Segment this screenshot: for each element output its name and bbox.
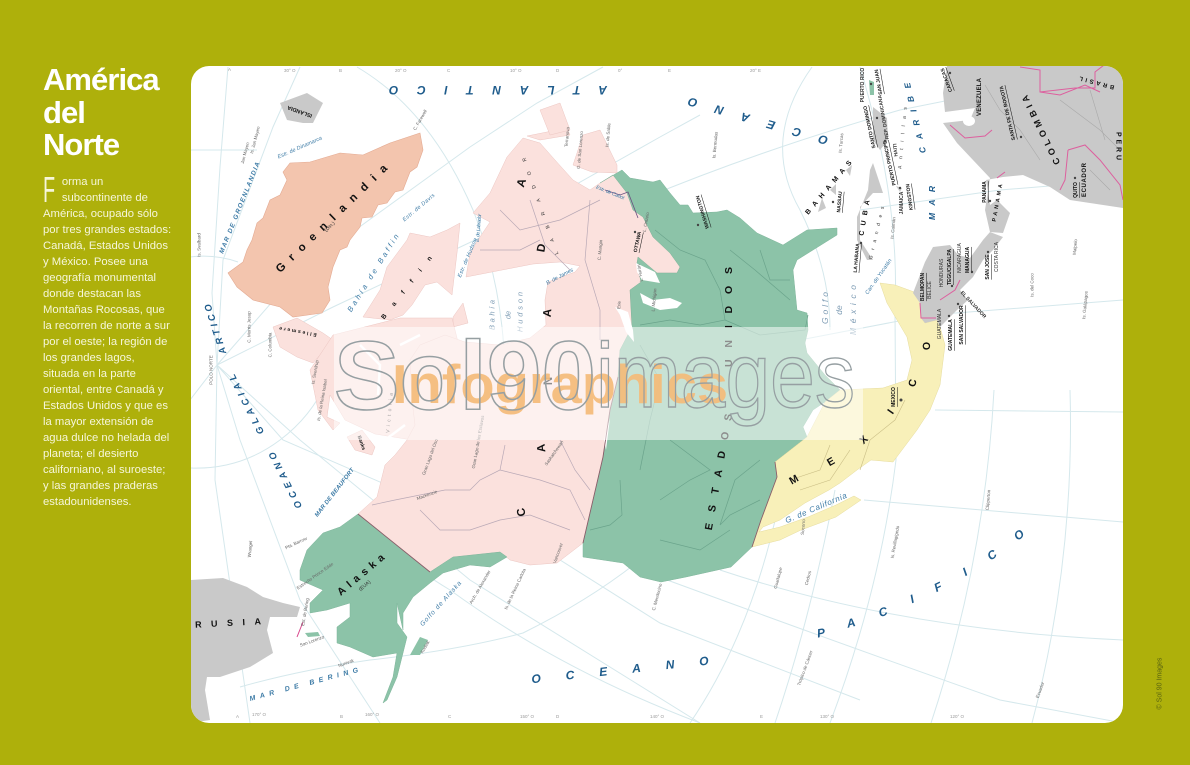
Canada-Alaska border	[358, 514, 430, 572]
minor labels: Is. Galápagos	[1081, 290, 1089, 319]
minor labels: L. Hurón	[636, 264, 644, 282]
graticule tick labels: B	[339, 68, 342, 73]
capital labels: NICARAGUA	[957, 242, 963, 273]
Banks: Banks	[356, 435, 366, 451]
Cuba: CUBA	[858, 200, 872, 236]
minor labels: Clipperton	[985, 489, 991, 510]
graticule tick labels	[228, 67, 965, 719]
graticule tick labels: C	[447, 68, 451, 73]
Mexico	[752, 283, 945, 547]
minor labels: Is. Jan Mayen	[249, 125, 261, 154]
South American borders	[920, 62, 1123, 318]
graticule tick labels: E	[668, 68, 671, 73]
minor labels: Trópico de Cáncer	[796, 649, 814, 686]
minor labels: Vancouver	[552, 542, 564, 564]
Estados: ESTADOS	[703, 413, 735, 531]
minor labels: Pta. Barrow	[284, 535, 308, 550]
minor labels: C. Farewell	[412, 109, 428, 131]
country labels	[195, 74, 1121, 630]
Panama country: PANAMA	[992, 184, 1004, 222]
graticule tick labels: 120° O	[950, 714, 965, 719]
Golfo: Golfo	[820, 292, 830, 324]
capital labels: PUERTO PRINCIPE	[882, 139, 898, 186]
capital labels: BELICE	[927, 280, 933, 299]
Islandia: ISLANDIA	[287, 104, 313, 118]
Bahia de James: B. de James	[545, 267, 575, 287]
capital labels: GUATEMALA	[937, 308, 943, 339]
panel: map of North America	[191, 66, 1123, 723]
graticule tick labels: 0°	[618, 68, 623, 73]
capital labels: EL SALVADOR	[959, 290, 987, 320]
Oceano north: OCEANO	[686, 94, 830, 148]
minor labels: L. Michigan	[651, 288, 658, 312]
Pacifico: C	[984, 547, 1000, 563]
title: América	[43, 62, 159, 97]
Colombia: COLOMBIA	[1020, 93, 1062, 166]
Peru: PERU	[1114, 132, 1122, 160]
Mar de Bering: MAR DE BERING	[249, 667, 360, 703]
graticule tick labels: 160° O	[365, 712, 380, 717]
minor labels: Is. del Coco	[1030, 273, 1034, 297]
Kodiak island	[410, 637, 428, 655]
minor labels: Nunivak	[338, 658, 355, 668]
minor labels: Gran Lago del Oso	[421, 438, 439, 476]
minor labels: Is. Caimán	[890, 217, 896, 239]
graticule tick labels: 10° O	[510, 68, 522, 73]
Great Lakes	[604, 263, 682, 450]
Greenland owner: (Din.)	[324, 220, 337, 233]
Grandes: Grandes	[868, 206, 886, 260]
graticule tick labels: 130° O	[820, 714, 835, 719]
arctic channels	[360, 335, 420, 440]
Canada letters: C	[515, 507, 529, 517]
Alaska owner: (EUA)	[358, 579, 372, 593]
capital labels: QUITO	[1073, 182, 1079, 198]
capital markers	[634, 72, 1076, 402]
capital labels: PANAMA	[982, 181, 988, 203]
graticule tick labels: 170° O	[252, 712, 267, 717]
capital labels: CARACAS	[940, 67, 954, 93]
capital labels: KINGSTON	[905, 183, 915, 210]
watermark images: images	[596, 325, 855, 427]
United States	[583, 170, 840, 582]
graticule tick labels: 20° O	[395, 68, 407, 73]
Pacifico: A	[844, 615, 857, 631]
minor labels: Saskatchewan	[544, 439, 565, 466]
minor labels: Is. de Sable	[604, 122, 612, 147]
Oceano south: OCEANO	[531, 654, 710, 686]
Canada letters: A	[515, 177, 529, 189]
capital labels: SAN JUAN	[874, 69, 884, 95]
Mexico letters: X	[857, 433, 871, 447]
minor labels: Guadalupe	[773, 566, 783, 589]
Pacifico: O	[1011, 526, 1028, 543]
minor labels: C. Morris Jesup	[246, 311, 252, 343]
Canada letters: A	[542, 308, 554, 318]
Mexico letters	[787, 341, 933, 487]
Canada letters: A	[536, 443, 548, 453]
Ellesmere: Ellesmere	[279, 325, 317, 337]
title	[43, 62, 160, 162]
Pacifico: I	[960, 565, 971, 579]
graticule tick labels: E	[760, 714, 763, 719]
ocean labels	[388, 83, 1028, 686]
title: del	[43, 94, 85, 130]
US-Mexico border	[752, 462, 777, 547]
Mexico letters: O	[921, 341, 933, 351]
minor labels: Malpelo	[1072, 238, 1078, 255]
Victoria: Victoria	[385, 393, 395, 433]
Glacial: GLACIAL	[227, 372, 267, 436]
capital labels: NASSAU	[836, 191, 844, 213]
capital labels: MEXICO	[891, 387, 897, 407]
Ecuador: ECUADOR	[1082, 162, 1088, 197]
capital labels: JAMAICA	[899, 191, 905, 214]
watermark Infographics: Infographics	[392, 353, 728, 415]
minor labels: L. Ontario	[642, 211, 650, 232]
minor labels: C. Mendocino	[651, 582, 663, 611]
Mar de Beaufort: MAR DE BEAUFORT	[314, 466, 357, 518]
Mexico letters: E	[825, 455, 837, 469]
de Mexico: de	[834, 305, 844, 315]
Pacifico: I	[908, 592, 917, 606]
minor labels: Is. Revillagigedo	[890, 525, 900, 559]
minor labels: Is. Svalbard	[196, 233, 202, 257]
Canada-US border	[583, 377, 618, 543]
minor labels: Is. Turcas	[838, 132, 844, 153]
minor labels: POLO NORTE	[208, 355, 214, 385]
capital labels: COSTA RICA	[994, 241, 1000, 272]
Golfo de Alaska: Golfo de Alaska	[419, 580, 463, 628]
Panama and Colombia	[943, 66, 1123, 233]
minor labels: Terranova	[564, 126, 570, 147]
sea labels	[218, 81, 937, 703]
minor labels: Ecuador	[1035, 681, 1045, 699]
Pacifico: F	[932, 579, 945, 595]
minor labels: San Lorenzo	[299, 634, 325, 648]
capital labels: PUERTO RICO	[860, 68, 866, 102]
minor labels: Kodiak	[419, 639, 431, 654]
Estr. de Davis: Estr. de Davis	[402, 193, 436, 223]
minor labels: Cedros	[804, 570, 812, 586]
Central America	[913, 232, 1003, 327]
intro text: orma un subcontinente de América, ocupado sólo por tres grandes estados: Canadá, Estados Unidos y México. Posee una geografía monumental donde destacan las Montañas Rocosas, que la recorren de norte a sur por el oeste; la región de los grandes lagos, situada en la parte oriental, entre Canadá y Estados Unidos y que es la mayor extensión de agua dulce no helada del planeta; el desierto californiano, al suroeste; y las grandes praderas estadounidenses.	[43, 176, 171, 508]
Estr. de Dinamarca: Estr. de Dinamarca	[277, 135, 323, 161]
graticule tick labels: A	[228, 67, 231, 72]
minor labels: Socorro	[800, 518, 806, 535]
Labrador: LABRADOR	[521, 156, 560, 255]
graticule tick labels: B	[340, 714, 343, 719]
Canada letters	[515, 177, 555, 517]
graticule tick labels: 140° O	[650, 714, 665, 719]
Bahia de Baffin: Bahía de Baffin	[345, 232, 401, 314]
graticule tick labels: A	[236, 714, 239, 719]
Pacifico: P	[816, 625, 827, 641]
Venezuela: VENEZUELA	[977, 77, 983, 116]
capital labels: REP. DOMINICANA	[877, 94, 891, 140]
Mar de Groenlandia: MAR DE GROENLANDIA	[218, 161, 262, 255]
minor labels: G. de San Lorenzo	[576, 130, 584, 169]
title: Norte	[43, 127, 119, 162]
capital labels: SANTA FE DE BOGOTA	[999, 85, 1017, 141]
Pacifico	[816, 526, 1028, 641]
graticule tick labels: C	[448, 714, 452, 719]
graticule tick labels: 150° O	[520, 714, 535, 719]
Antillas: Antillas	[897, 106, 909, 169]
graticule tick labels: D	[556, 68, 560, 73]
graticule tick labels: D	[556, 714, 560, 719]
capital labels: OTTAWA	[633, 231, 643, 253]
capital labels: SAN JOSE	[985, 254, 991, 280]
minor labels: Gran Lago de los Esclavos	[471, 414, 485, 469]
Pacifico: C	[877, 604, 890, 620]
US-Canada marine boundary	[605, 190, 638, 218]
minor labels: Erie	[616, 300, 622, 309]
Bahamas: BAHAMAS	[804, 159, 854, 216]
Mexico letters: I	[885, 407, 897, 417]
minor labels: Est. de Bering	[300, 597, 310, 626]
Mexico gulf: México	[848, 285, 858, 335]
Canal de Yucatan: Can. de Yucatán	[864, 258, 894, 296]
Caribbean islands	[818, 80, 902, 260]
minor labels: Wrangel	[247, 540, 253, 558]
minor labels: Is. Bermudas	[711, 131, 719, 158]
South American rivers	[985, 85, 1120, 190]
Unidos: UNIDOS	[723, 267, 735, 367]
Canada letters: D	[535, 243, 549, 253]
Estr. de Lancaster: E. de Labrador	[475, 213, 483, 242]
minor labels: Is. de la Reina Carlota	[503, 567, 527, 610]
Alaska	[300, 514, 507, 703]
Russia	[190, 578, 300, 723]
Mar: MAR	[927, 185, 937, 220]
Atlantic: ATLANTICO	[388, 83, 608, 97]
graticule tick labels: 30° O	[284, 68, 296, 73]
drop cap: F	[43, 169, 55, 210]
Golfo de California: G. de California	[784, 491, 849, 525]
capital labels: SANTO DOMINGO	[863, 105, 877, 149]
Canada arctic islands	[273, 103, 617, 455]
Artico: ARTICO	[203, 302, 230, 356]
Russia-Alaska date line	[297, 622, 303, 637]
minor labels: C. Columbia	[268, 332, 272, 357]
Estr. de Hudson: Estr. de Hudson	[457, 237, 479, 279]
US rivers	[590, 230, 808, 550]
Lake Maracaibo	[963, 116, 975, 126]
capital labels: GUATEMALA	[948, 319, 954, 351]
Canada	[358, 138, 680, 572]
capital labels: SAN SALVADOR	[959, 305, 965, 345]
minor labels: Mackenzie	[416, 489, 438, 501]
capital labels: MANAGUA	[965, 247, 971, 273]
Estr. de Cabot: Estr. de Cabot	[595, 185, 626, 202]
Greenland	[228, 133, 423, 317]
Brasil: BRASIL	[1079, 74, 1115, 90]
capital labels: HONDURAS	[939, 258, 945, 287]
graticule tick labels: 20° E	[750, 68, 761, 73]
capital labels	[633, 67, 1079, 407]
Baffin: Baffin	[380, 255, 434, 321]
Saint Lawrence island	[305, 632, 320, 637]
Mexico letters: C	[906, 378, 920, 388]
Alaska: Alaska	[335, 552, 387, 598]
Iceland	[280, 93, 323, 123]
minor labels: Is. Sverdrup	[310, 359, 320, 384]
Groenlandia: Groenlandia	[274, 162, 391, 275]
Bahia: Bahía	[488, 300, 496, 330]
watermark Sol90: Sol90	[334, 321, 596, 430]
Canada interior rivers and borders	[372, 200, 600, 530]
minor labels: Estrecho Prince Edde	[296, 561, 335, 591]
Hudson: Hudson	[516, 292, 524, 332]
Canada letters: N	[543, 377, 555, 385]
de: de	[504, 311, 512, 319]
Mexico letters: M	[787, 472, 801, 487]
minor labels: Arch. de Alexander	[468, 569, 492, 605]
Rusia: RUSIA	[195, 616, 262, 630]
minor labels: Is. de la Reina Isabel	[316, 379, 328, 421]
capital labels: WASHINGTON	[695, 194, 711, 229]
Arctic ocean labels	[203, 302, 305, 510]
Oceano Glacial: OCEANO	[267, 449, 305, 510]
capital labels: BELMOPAN	[920, 272, 926, 301]
watermark fade band	[334, 327, 863, 440]
capital labels: TEGUCIGALPA	[947, 249, 953, 285]
capital labels: LA HABANA	[853, 243, 861, 273]
Caribe: CARIBE	[902, 81, 928, 154]
Mexico borders	[790, 400, 905, 490]
minor labels	[196, 109, 1089, 699]
minor labels: Jan Mayen	[240, 141, 250, 164]
capital labels: HAITI	[892, 143, 900, 157]
minor labels: C. Mangin	[597, 239, 603, 260]
copyright credit: © Sol 90 Images	[1156, 658, 1164, 709]
